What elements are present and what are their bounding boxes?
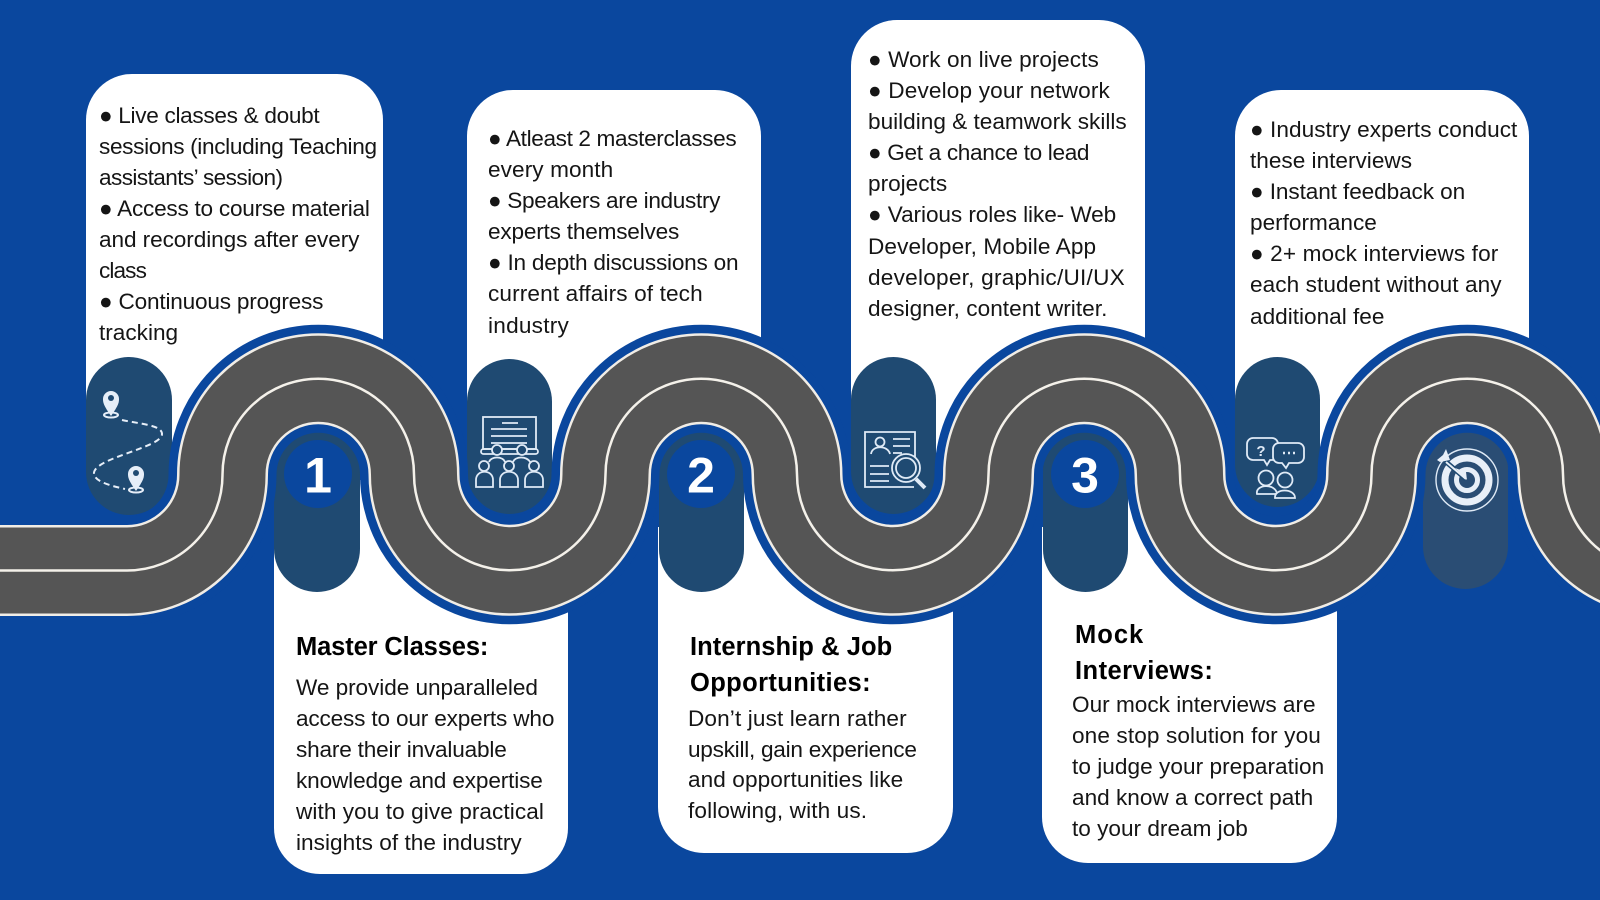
text: masterclass bullets: experts themselves (488, 219, 679, 244)
text: master classes description: knowledge and expertise (296, 768, 543, 793)
text: live classes bullets: sessions (including Teaching (99, 134, 377, 159)
icon: classroom (476, 417, 543, 487)
badge: number 1: 1 (304, 448, 332, 504)
text: master classes description: insights of the industry (296, 830, 522, 855)
text: mock interviews description: to your dream job (1072, 816, 1248, 841)
text: master classes description: We provide unparalleled (296, 675, 538, 700)
text: interview bullets: additional fee (1250, 304, 1384, 329)
heading: internship and job opportunities: Opportunities: (690, 669, 871, 697)
text: mock interviews description: Our mock interviews are (1072, 692, 1316, 717)
text: live projects bullets: developer, graphic/UI/UX (868, 265, 1125, 290)
text: interview bullets: these interviews (1250, 148, 1412, 173)
text: internship description: upskill, gain experience (688, 737, 917, 762)
text: live classes bullets: tracking (99, 320, 178, 345)
pill: resume icon background (851, 357, 936, 514)
heading: mock interviews (1075, 621, 1213, 685)
pill: step 3 (1043, 425, 1128, 592)
heading: mock interviews: Mock (1075, 621, 1144, 649)
text: live projects bullets: ● Develop your network (868, 78, 1110, 103)
text: live classes bullets: ● Access to course material (99, 196, 370, 221)
text: interview bullets: performance (1250, 210, 1377, 235)
text: mock interviews description: and know a correct path (1072, 785, 1313, 810)
text: live classes bullets: ● Live classes & doubt (99, 102, 319, 128)
badge: number 3 (1051, 440, 1119, 508)
text: interview bullets: each student without any (1250, 272, 1502, 297)
text: master classes description (296, 675, 554, 855)
text: internship description: Don’t just learn rather (688, 706, 907, 731)
pill: step 2 (659, 425, 744, 592)
badge: number 2: 2 (687, 448, 715, 504)
text: live projects bullets: ● Get a chance to lead (868, 140, 1089, 165)
panel: step 3 mock interviews (1042, 527, 1337, 863)
text: master classes description: access to our experts who (296, 706, 554, 731)
heading: internship and job opportunities: Internship & Job (690, 633, 892, 661)
pill: target icon background (1423, 425, 1508, 589)
panel: masterclass details (467, 90, 761, 425)
text: mock interviews description: one stop solution for you (1072, 723, 1321, 748)
pill: route icon background (86, 357, 172, 515)
text: masterclass bullets: industry (488, 313, 569, 338)
text: masterclass bullets: ● In depth discussions on (488, 250, 738, 275)
text: internship description (688, 706, 917, 823)
text: live projects bullets: ● Various roles like- Web (868, 202, 1116, 227)
text: interview bullets: ● Instant feedback on (1250, 179, 1465, 204)
heading: mock interviews: Interviews: (1075, 657, 1213, 685)
text: live projects bullets (868, 47, 1127, 321)
panel: live classes (86, 74, 383, 425)
badge: number 3: 3 (1071, 448, 1099, 504)
text: live classes bullets (99, 102, 377, 345)
icon: question chat (1247, 438, 1304, 498)
road (0, 379, 1600, 571)
panel: step 2 internship (658, 527, 953, 853)
text: internship description: and opportunities like (688, 767, 903, 792)
text: masterclass bullets (488, 126, 738, 338)
text: interview bullets (1250, 117, 1518, 329)
text: live projects bullets: projects (868, 171, 947, 196)
text: master classes description: share their invaluable (296, 737, 507, 762)
text: interview bullets: ● Industry experts conduct (1250, 117, 1517, 142)
heading: internship and job opportunities (690, 633, 892, 697)
text: live projects bullets: building & teamwork skills (868, 109, 1127, 134)
text: masterclass bullets: ● Atleast 2 masterclasses (488, 126, 736, 151)
text: live projects bullets: Developer, Mobile App (868, 234, 1096, 259)
panel: interview details (1235, 90, 1529, 425)
text: live classes bullets: assistants’ session) (99, 165, 282, 190)
pill: step 1 (274, 425, 360, 592)
icon: resume search (865, 432, 925, 488)
text: live classes bullets: ● Continuous progress (99, 289, 323, 314)
heading: master classes: Master Classes: (296, 633, 488, 661)
text: live classes bullets: and recordings after every (99, 227, 359, 252)
text: live classes bullets: class (99, 258, 146, 283)
text: mock interviews description (1072, 692, 1324, 841)
panel: step 1 master classes (274, 527, 568, 874)
badge: number 2 (667, 440, 735, 508)
text: live projects bullets: designer, content writer. (868, 296, 1107, 321)
text: live projects bullets: ● Work on live projects (868, 47, 1099, 72)
icon: question chat: ? (1256, 443, 1266, 460)
pill: classroom icon background (467, 359, 552, 514)
text: mock interviews description: to judge your preparation (1072, 754, 1324, 779)
icon: route with pins (94, 391, 162, 492)
icon: target with arrow (1436, 449, 1498, 511)
text: master classes description: with you to give practical (296, 799, 544, 824)
pill: chat icon background (1235, 357, 1320, 507)
text: masterclass bullets: ● Speakers are industry (488, 188, 720, 213)
text: interview bullets: ● 2+ mock interviews for (1250, 241, 1498, 266)
badge: number 1 (284, 440, 352, 508)
panel: live projects (851, 20, 1145, 425)
text: masterclass bullets: every month (488, 157, 613, 182)
text: internship description: following, with us. (688, 798, 867, 823)
text: masterclass bullets: current affairs of tech (488, 281, 703, 306)
